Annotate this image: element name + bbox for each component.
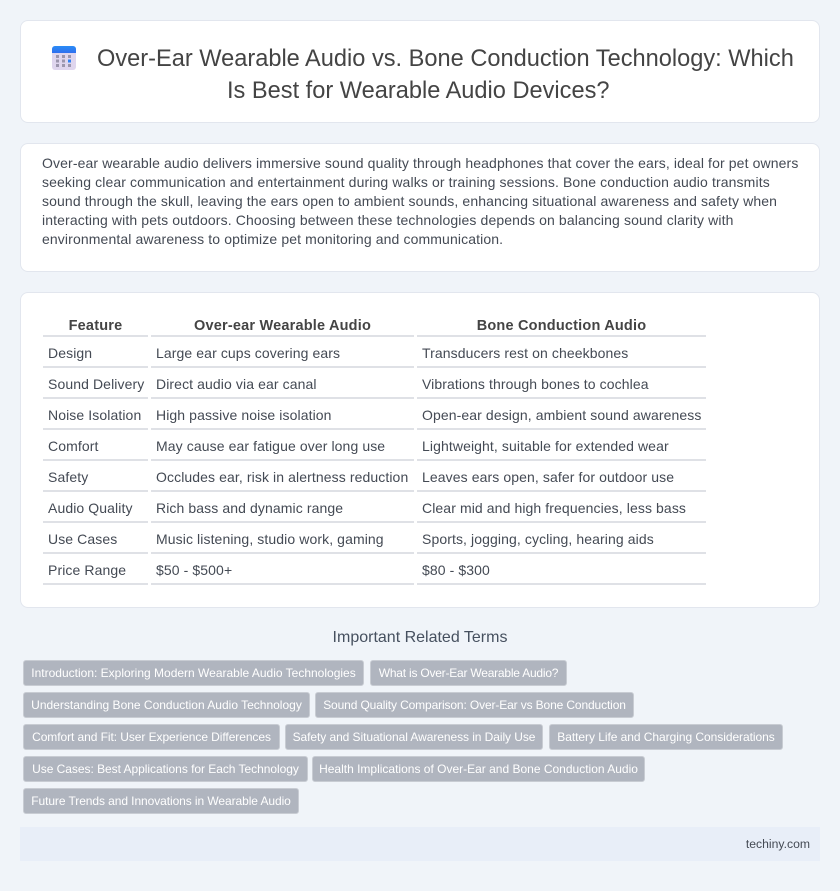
comparison table: Noise Isolation	[48, 407, 141, 423]
comparison table: Rich bass and dynamic range	[156, 500, 343, 516]
related term tags: Battery Life and Charging Considerations	[557, 730, 775, 744]
related term tags: What is Over-Ear Wearable Audio?	[379, 666, 558, 680]
comparison table: Clear mid and high frequencies, less bass	[422, 500, 686, 516]
panel: summary card	[20, 143, 820, 272]
comparison table: Comfort	[48, 438, 98, 454]
comparison table: Over-ear Wearable Audio	[194, 318, 371, 334]
comparison table: Occludes ear, risk in alertness reduction	[156, 469, 408, 485]
comparison table: High passive noise isolation	[156, 407, 332, 423]
comparison table: May cause ear fatigue over long use	[156, 438, 385, 454]
comparison table: Feature	[69, 318, 122, 334]
footer credit: techiny.com	[746, 837, 810, 851]
comparison table: Audio Quality	[48, 500, 133, 516]
related term tags: Safety and Situational Awareness in Daily Use	[293, 730, 535, 744]
related term tags	[23, 660, 783, 814]
comparison table: Sound Delivery	[48, 376, 144, 392]
heading: important related terms: Important Related Terms	[333, 629, 507, 646]
comparison table: Price Range	[48, 562, 126, 578]
comparison table: Large ear cups covering ears	[156, 345, 340, 361]
icon: calendar	[52, 46, 76, 70]
comparison table: $80 - $300	[422, 562, 490, 578]
comparison table: Safety	[48, 469, 88, 485]
panel: title card	[20, 20, 820, 123]
panel: comparison table card	[20, 292, 820, 608]
text block: summary paragraph: seeking clear communication and entertainment during walks or training sessions. Bone conduction audio transmits	[42, 174, 770, 190]
comparison table: Bone Conduction Audio	[477, 318, 646, 334]
title	[97, 46, 794, 104]
related term tags: Use Cases: Best Applications for Each Technology	[32, 762, 299, 776]
related term tags: Future Trends and Innovations in Wearable Audio	[31, 794, 291, 808]
related term tags: Health Implications of Over-Ear and Bone Conduction Audio	[319, 762, 638, 776]
comparison table: Vibrations through bones to cochlea	[422, 376, 649, 392]
comparison table	[43, 318, 706, 585]
comparison table: Use Cases	[48, 531, 117, 547]
related term tags: Comfort and Fit: User Experience Differences	[32, 730, 271, 744]
related term tags: Understanding Bone Conduction Audio Technology	[31, 698, 302, 712]
comparison table: Transducers rest on cheekbones	[422, 345, 628, 361]
comparison table: $50 - $500+	[156, 562, 232, 578]
comparison table: Music listening, studio work, gaming	[156, 531, 384, 547]
text block: summary paragraph: sound through the skull, leaving the ears open to ambient sounds, enhancing situational awareness and safety when	[42, 193, 777, 209]
text block: summary paragraph: interacting with pets outdoors. Choosing between these technologies depends on balancing sound clarity with	[42, 212, 734, 228]
footer	[20, 827, 820, 861]
title: Is Best for Wearable Audio Devices?	[227, 78, 610, 104]
comparison table: Design	[48, 345, 92, 361]
comparison table: Lightweight, suitable for extended wear	[422, 438, 669, 454]
comparison table: Direct audio via ear canal	[156, 376, 317, 392]
comparison table: Sports, jogging, cycling, hearing aids	[422, 531, 654, 547]
text block: summary paragraph: Over-ear wearable audio delivers immersive sound quality through headphones that cover the ears, ideal for pet owners	[42, 155, 798, 171]
comparison table: Open-ear design, ambient sound awareness	[422, 407, 702, 423]
text block: summary paragraph: environmental awareness to optimize pet monitoring and communication.	[42, 231, 503, 247]
comparison table: Leaves ears open, safer for outdoor use	[422, 469, 674, 485]
text block: summary paragraph	[42, 155, 798, 247]
related term tags: Introduction: Exploring Modern Wearable Audio Technologies	[31, 666, 356, 680]
related term tags: Sound Quality Comparison: Over-Ear vs Bone Conduction	[323, 698, 626, 712]
title: Over-Ear Wearable Audio vs. Bone Conduction Technology: Which	[97, 46, 794, 72]
